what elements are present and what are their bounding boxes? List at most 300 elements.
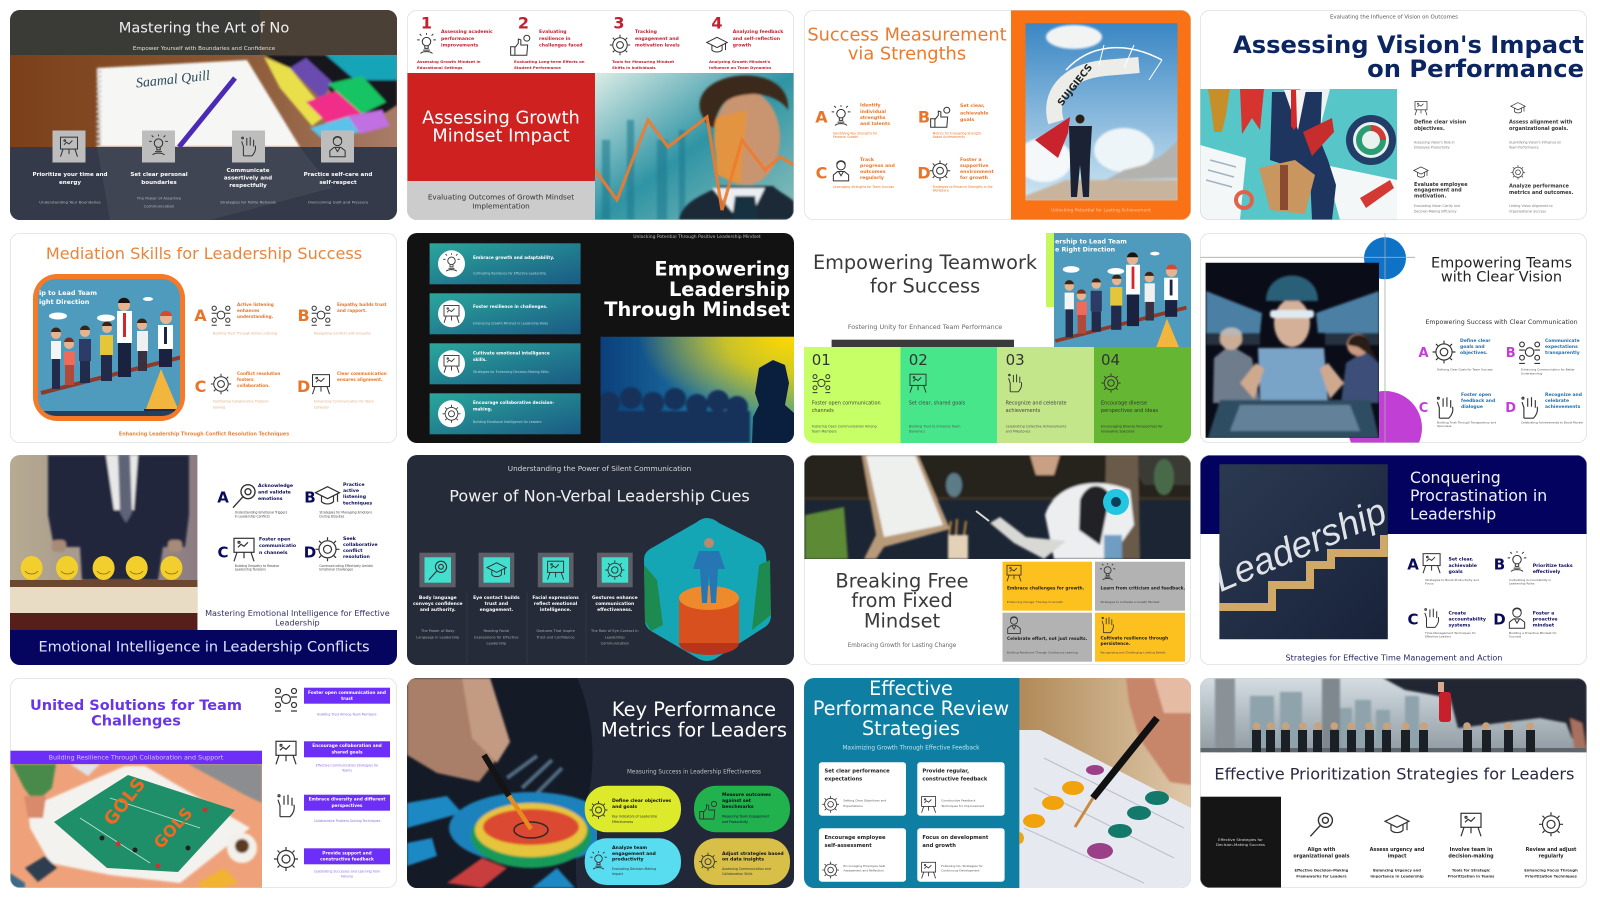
metric: objectives: Key Indicators of Leadership xyxy=(612,815,657,819)
tile: embrace growth: Cultivating Resilience for Effective Leadership xyxy=(473,271,546,275)
step: collaboration: Encourage collaboration and xyxy=(312,743,382,749)
item C: Foster open xyxy=(259,536,290,542)
step: support: constructive feedback xyxy=(320,856,374,862)
step: open communication xyxy=(275,688,390,717)
item D: Seek xyxy=(343,536,357,542)
item: align: Effective Decision-Making xyxy=(1295,868,1349,872)
metric: engagement: Evaluating Decision-Making xyxy=(612,867,656,871)
metric: outcomes: and Productivity xyxy=(722,820,748,824)
step 1: Educational Settings xyxy=(417,65,463,70)
column 03 xyxy=(997,347,1094,443)
cue: eye contact: Leadership xyxy=(487,641,507,645)
step 3 xyxy=(610,14,680,70)
item B: Navigating Conflicts with Empathy xyxy=(314,331,371,335)
item B xyxy=(918,103,988,139)
item: boundaries: boundaries xyxy=(141,180,177,186)
step: collaboration: Effective Communication Strategies for xyxy=(316,764,379,768)
metric: strategies: Assessing Communication and xyxy=(722,867,771,871)
item C: Leadership Tensions xyxy=(235,567,266,571)
step 2: Evaluating Long-term Effects on xyxy=(514,59,585,64)
metric: engagement: productivity xyxy=(612,856,644,862)
item: align: organizational goals xyxy=(1293,854,1350,860)
step 1: Assessing Growth Mindset in xyxy=(417,59,481,64)
item D: environment xyxy=(960,169,994,175)
step 1: improvements xyxy=(441,42,479,48)
metric: engagement: Analyze team xyxy=(612,845,647,851)
title xyxy=(1431,255,1572,286)
photo: figurines and a red pawn xyxy=(1200,678,1587,752)
step 3: motivation levels xyxy=(635,42,680,48)
item D: D xyxy=(1493,610,1506,628)
photo: team on a beam in rounded frame: ight Direction xyxy=(39,298,90,306)
metric: objectives: Effectiveness xyxy=(612,820,634,824)
item C xyxy=(217,536,297,571)
item D xyxy=(917,157,994,193)
column 01: Team Members xyxy=(811,430,837,434)
cue: body language: conveys confidence xyxy=(413,601,463,607)
subtitle: Mastering Emotional Intelligence for Effective xyxy=(205,608,390,618)
item A xyxy=(1418,338,1493,372)
cue: body language: Body language xyxy=(419,595,457,601)
purple band: Building Resilience Through Collaboration and Support xyxy=(49,753,224,761)
red title panel: Assessing Growth xyxy=(422,108,580,128)
column 02: Set clear, shared goals xyxy=(909,400,966,406)
card: clear expectations: expectations xyxy=(824,776,862,782)
subtitle: Empower Yourself with Boundaries and Confidence xyxy=(133,46,276,52)
metric: engagement: Impact xyxy=(612,872,624,876)
item: assess alignment: Quantifying Vision's Influence on xyxy=(1509,140,1561,144)
item D: D xyxy=(1505,401,1516,416)
metric: outcomes: Measure outcomes xyxy=(722,792,771,798)
item: involve team: Prioritization in Teams xyxy=(1448,874,1495,878)
item A: A xyxy=(1407,555,1419,573)
tile: emotional intelligence: Strategies for Enhancing Decision-Making Skills xyxy=(473,370,549,374)
item B: Enhancing Communication for Better xyxy=(1521,368,1575,372)
column 04: Innovative Solutions xyxy=(1101,430,1135,434)
orange panel xyxy=(1011,10,1191,220)
title: Success Measurement xyxy=(807,24,1007,46)
item A: Active listening xyxy=(237,302,274,307)
item: assess alignment xyxy=(1508,103,1573,149)
title: Through Mindset xyxy=(604,298,790,321)
title xyxy=(813,251,1038,298)
column 03: achievements xyxy=(1006,408,1041,414)
item: assess alignment: Assess alignment with xyxy=(1509,119,1573,125)
item B: Metrics for Evaluating Strength- xyxy=(933,131,982,135)
photo: robot drawing on a monitor xyxy=(804,455,1191,559)
metric: objectives xyxy=(585,786,681,832)
item: review xyxy=(1524,812,1578,878)
item C: Conflict resolution xyxy=(237,371,280,376)
item D: Recognize and xyxy=(1545,392,1582,398)
step: support: Failures xyxy=(341,875,353,879)
metric: outcomes: Measuring Team Engagement xyxy=(722,815,770,819)
card: clear expectations: Set clear performance xyxy=(824,769,890,775)
step 1: performance xyxy=(441,36,474,42)
slide: Mediation Skills for Leadership Success xyxy=(10,233,397,443)
cue: facial expressions: Gestures That Inspire xyxy=(536,629,576,633)
item C: C xyxy=(195,377,206,396)
column 01 xyxy=(804,347,900,443)
item D xyxy=(1493,608,1558,639)
card: self-assessment: Assessment and Reflection xyxy=(843,869,884,873)
title: for Success xyxy=(870,274,980,298)
item D: Building a Proactive Mindset for xyxy=(1509,631,1557,635)
photo: chalkboard with wooden steps: Leadership xyxy=(1208,490,1392,600)
item D: proactive xyxy=(1533,616,1558,622)
title: Mindset xyxy=(864,610,941,632)
slide: Empowering Teamwork for Success xyxy=(804,233,1191,443)
item D: Success xyxy=(1509,635,1522,639)
item B: B xyxy=(304,489,316,507)
item: boundaries: Set clear personal xyxy=(130,172,188,178)
tile: learn from criticism: Strategies to Cultivate a Growth Mindset xyxy=(1100,600,1160,604)
photo: team on a beam xyxy=(1054,233,1191,347)
item C: collaboration. xyxy=(237,383,270,388)
step: diversity: Collaborative Problem-Solving Techniques xyxy=(314,819,381,823)
cue: eye contact: engagement. xyxy=(480,607,513,613)
navy band with title xyxy=(1200,455,1587,534)
tile: embrace growth: Embrace growth and adaptability. xyxy=(473,255,555,261)
step: collaboration xyxy=(276,741,390,773)
title xyxy=(30,698,242,729)
title: Empowering Teamwork xyxy=(813,251,1038,274)
title xyxy=(835,570,969,632)
item D xyxy=(1505,392,1583,424)
step: collaboration: shared goals xyxy=(331,750,363,756)
card: regular feedback: Techniques for Improvement xyxy=(940,804,985,808)
item C: Solving xyxy=(213,405,225,409)
item D: Emotional Challenges xyxy=(319,567,353,571)
item B: B xyxy=(297,306,310,325)
item B: Practice xyxy=(343,482,364,488)
lime strip xyxy=(1046,233,1054,307)
item A: goals and xyxy=(1460,344,1485,350)
column 04 xyxy=(1094,347,1191,443)
step 4: 4 xyxy=(711,14,723,32)
item A xyxy=(1407,554,1479,586)
item A: and talents xyxy=(860,121,890,127)
dark bar xyxy=(832,340,1014,347)
subtitle: Maximizing Growth Through Effective Feedback xyxy=(842,745,980,751)
step 2: resilience in xyxy=(539,36,571,42)
item C xyxy=(1419,392,1496,428)
step: open communication: Foster open communication and xyxy=(308,690,386,696)
step 2: Student Performance xyxy=(514,65,561,70)
item B: Understanding xyxy=(1521,371,1542,375)
cue: gestures xyxy=(590,553,639,645)
item C: communicatio xyxy=(259,543,297,549)
item: boundaries xyxy=(130,130,188,208)
navy band with title: Conquering xyxy=(1410,468,1501,487)
item A: strengths xyxy=(860,115,886,121)
item D: D xyxy=(917,164,931,182)
item D: Communicating Effectively Amidst xyxy=(319,564,374,568)
step 3: Tracking xyxy=(635,29,657,35)
slide: Empowering Teams with Clear Vision xyxy=(1200,233,1587,465)
grey subtitle panel xyxy=(407,181,595,220)
card: development: and growth xyxy=(922,843,956,849)
step 3: Tools for Measuring Mindset xyxy=(612,59,674,64)
item: prioritize xyxy=(33,130,107,204)
subtitle: Measuring Success in Leadership Effectiveness xyxy=(627,770,761,776)
title xyxy=(808,28,1006,63)
step 4: growth xyxy=(733,42,751,48)
black side panel: Decision-Making Success xyxy=(1216,842,1265,847)
step 4 xyxy=(707,14,784,70)
photo: man reviewing documents xyxy=(1200,89,1397,220)
card: clear expectations: Expectations xyxy=(843,804,863,808)
metric: strategies xyxy=(694,838,790,885)
subtitle xyxy=(205,608,390,627)
title: Effective Prioritization Strategies for Leaders xyxy=(1214,764,1574,784)
tile: cultivate resilience xyxy=(1095,613,1185,662)
item: self-care: Practice self-care and xyxy=(304,172,372,178)
cue: gestures: communication xyxy=(595,601,634,607)
card: development: Focus on development xyxy=(922,835,989,841)
item B: techniques xyxy=(343,500,372,506)
card: self-assessment: self-assessment xyxy=(824,843,872,849)
item D: mindset xyxy=(1533,622,1555,628)
title: with Clear Vision xyxy=(1441,270,1562,286)
item B: goals xyxy=(960,117,974,123)
item D: Foster a xyxy=(960,157,982,163)
item: analyze metrics: metrics and outcomes. xyxy=(1509,190,1573,196)
item C: Time-Management Techniques for xyxy=(1424,631,1477,635)
photo: caped businessman and gauge xyxy=(1026,23,1178,200)
item A: Acknowledge xyxy=(258,483,293,489)
item: define objectives: Assessing Vision's Role in xyxy=(1414,140,1455,144)
photo: notebook and sticky notes xyxy=(10,10,397,220)
title: Key Performance xyxy=(612,698,776,721)
item B: Set clear, xyxy=(960,103,985,109)
photo: football pitch with GOALS on a scroll xyxy=(10,764,262,888)
item B: expectations xyxy=(1545,344,1578,350)
item: self-care: self-respect xyxy=(319,180,357,186)
item C xyxy=(1407,609,1486,639)
cue: facial expressions: reflect emotional xyxy=(534,601,578,607)
slide: Mastering the Art of No xyxy=(10,10,397,220)
metric: engagement xyxy=(585,838,681,885)
item B: Prioritize tasks xyxy=(1533,563,1573,569)
image: figure on a pedestal in a hexagon xyxy=(644,518,771,661)
cue: eye contact: Reading Facial xyxy=(483,629,509,633)
slide: Power of Non-Verbal Leadership Cues xyxy=(407,455,794,665)
photo: caped businessman and gauge: SUJGIECS xyxy=(1056,62,1095,108)
title: Metrics for Leaders xyxy=(601,718,787,742)
item C: progress and xyxy=(860,163,895,169)
item C: accountability xyxy=(1448,616,1486,622)
tile: learn from criticism: Learn from criticism and feedback. xyxy=(1100,586,1186,592)
column 01: channels xyxy=(812,408,834,414)
item: communicate: Strategies for Polite Refusals xyxy=(220,200,276,204)
title xyxy=(601,698,787,742)
item A: Understanding Emotional Triggers xyxy=(235,511,288,515)
item B: transparently xyxy=(1545,350,1580,356)
item A: enhances xyxy=(237,308,260,313)
photo: football pitch with GOALS on a scroll: GOLS xyxy=(150,804,196,852)
item: evaluate engagement: motivation. xyxy=(1414,194,1446,200)
navy band with title: Procrastination in xyxy=(1410,486,1547,505)
tile: foster resilience xyxy=(430,293,581,334)
item: involve team xyxy=(1448,813,1495,878)
item D: D xyxy=(297,377,310,396)
cue: eye contact xyxy=(473,553,520,645)
title: United Solutions for Team xyxy=(30,698,242,714)
footer: Strategies for Effective Time Management and Action xyxy=(1286,653,1502,663)
slide: Key Performance Metrics for Leaders xyxy=(407,678,794,888)
metric: strategies: on data insights xyxy=(722,856,764,862)
card: self-assessment xyxy=(819,828,906,882)
metric: objectives: Define clear objectives xyxy=(612,798,671,804)
black side panel: Effective Strategies for xyxy=(1218,837,1263,842)
item: urgency: Assess urgency and xyxy=(1370,847,1425,853)
photo: woman at a holographic table xyxy=(1206,262,1379,438)
column 02: 02 xyxy=(909,351,928,369)
tile: emotional intelligence: skills. xyxy=(473,357,487,363)
item B: During Disputes xyxy=(319,515,345,519)
step 3: engagement and xyxy=(635,36,679,42)
item B: achievable xyxy=(960,110,988,116)
slide: Success Measurement via Strengths xyxy=(804,10,1191,220)
item: assess alignment: Team Performance xyxy=(1508,145,1539,149)
tile: collaborative decisions xyxy=(430,393,581,434)
title: Effective xyxy=(869,677,953,700)
item D: resolution xyxy=(343,554,370,560)
tile: foster resilience: Foster resilience in challenges. xyxy=(473,304,548,310)
item: involve team: decision-making xyxy=(1448,854,1494,860)
photo: young man with chart xyxy=(595,73,794,220)
tile: embrace challenges: Enhancing Change: The Key to Growth xyxy=(1007,600,1063,604)
item B: listening xyxy=(343,494,366,500)
item C: C xyxy=(1407,610,1419,628)
tile: embrace growth xyxy=(430,243,581,284)
item A: Building Trust Through Active Listening xyxy=(213,331,277,335)
cue: facial expressions xyxy=(532,553,579,639)
title: on Performance xyxy=(1367,55,1584,83)
column 04: Encouraging Diverse Perspectives for xyxy=(1101,424,1163,428)
item: communicate: Communicate xyxy=(226,168,270,174)
item: evaluate engagement: Decision-Making Efficiency xyxy=(1414,210,1457,214)
item C: systems xyxy=(1448,622,1470,628)
item D: celebrate xyxy=(1545,398,1569,404)
tile: learn from criticism xyxy=(1095,562,1186,611)
footer: Enhancing Leadership Through Conflict Resolution Techniques xyxy=(119,431,289,437)
item: analyze metrics: Analyze performance xyxy=(1509,183,1569,189)
item: urgency: Balancing Urgency and xyxy=(1373,868,1421,872)
item: evaluate engagement: engagement and xyxy=(1414,188,1462,194)
item B: B xyxy=(918,108,930,126)
item: prioritize: Understanding Your Boundaries xyxy=(39,200,101,204)
title: Power of Non-Verbal Leadership Cues xyxy=(449,486,750,506)
item A: Define clear xyxy=(1460,338,1491,344)
item C: regularly xyxy=(860,175,884,181)
item A: individual xyxy=(860,109,886,115)
navy title band: Emotional Intelligence in Leadership Conflicts xyxy=(38,640,370,656)
item A: and validate xyxy=(258,490,291,496)
item C: n channels xyxy=(259,550,288,556)
item D: supportive xyxy=(960,163,988,169)
orange panel: Unlocking Potential for Lasting Achievement xyxy=(1051,208,1151,214)
card: clear expectations: Setting Clear Objectives and xyxy=(843,799,886,803)
item D: for growth xyxy=(960,175,988,181)
item: boundaries: Communication xyxy=(144,204,175,208)
slide: Empowering Leadership Through Mindset xyxy=(407,233,794,443)
step 3: 3 xyxy=(613,14,625,32)
item C: Create xyxy=(1448,610,1466,616)
column 01: 01 xyxy=(812,351,831,369)
item C: C xyxy=(1419,401,1428,416)
item A: A xyxy=(217,489,229,507)
column 02: Building Trust to Enhance Team xyxy=(909,424,960,428)
step 1 xyxy=(417,14,493,70)
item D: D xyxy=(304,544,316,562)
item: urgency: impact xyxy=(1388,854,1407,860)
card: regular feedback xyxy=(917,762,1005,816)
cue: facial expressions: Trust and Confidence xyxy=(536,635,575,639)
cue: eye contact: Expressions for Effective xyxy=(474,635,519,639)
item C: feedback and xyxy=(1461,398,1495,404)
step 3: Shifts in Individuals xyxy=(612,65,656,70)
item D: Enhancing Communication for Team xyxy=(314,400,374,404)
metric: engagement: engagement and xyxy=(612,851,656,857)
column 02 xyxy=(900,347,997,443)
item A: A xyxy=(194,306,207,325)
tile: emotional intelligence xyxy=(430,343,581,384)
title xyxy=(1233,34,1584,78)
column 03: 03 xyxy=(1006,351,1025,369)
step: diversity xyxy=(278,795,390,823)
step: support: Provide support and xyxy=(322,850,372,856)
card: regular feedback: constructive feedback xyxy=(922,776,988,782)
item: align xyxy=(1293,813,1350,878)
item B: Leadership Roles xyxy=(1509,582,1535,586)
column 01: Foster open communication xyxy=(812,400,881,406)
grey subtitle panel: Implementation xyxy=(472,202,530,210)
top subtitle: Unlocking Potential Through Positive Leadership Mindset xyxy=(633,234,761,240)
card: regular feedback: Provide regular, xyxy=(922,769,969,775)
step 2: 2 xyxy=(518,14,529,32)
item D: collaborative xyxy=(343,542,378,548)
title: Mastering the Art of No xyxy=(119,20,289,36)
tile: collaborative decisions: making. xyxy=(473,406,493,412)
item: define objectives: Define clear vision xyxy=(1414,119,1467,125)
item: communicate: assertively and xyxy=(224,176,272,182)
item: define objectives xyxy=(1414,101,1467,149)
cue: gestures: Leadership xyxy=(605,635,625,639)
step 2: challenges faced xyxy=(539,42,583,48)
title: Empowering xyxy=(654,258,790,280)
item D: Strategies to Enhance Strengths in the xyxy=(933,185,993,189)
title: Mediation Skills for Leadership Success xyxy=(46,244,362,263)
column 03: Recognize and celebrate xyxy=(1006,400,1067,406)
step: diversity: Embrace diversity and different xyxy=(309,796,385,802)
card: clear expectations xyxy=(819,762,906,816)
item: evaluate engagement xyxy=(1414,167,1468,214)
tile: emotional intelligence: Cultivate emotional intelligence xyxy=(473,350,550,356)
cue: gestures: The Role of Eye Contact in xyxy=(590,629,639,633)
card: development: Continuous Development xyxy=(941,869,980,873)
blue circle xyxy=(1364,237,1406,279)
title: Challenges xyxy=(91,713,181,729)
cue: facial expressions: Facial expressions xyxy=(532,595,579,601)
item A: emotions xyxy=(258,496,283,502)
photo: chalkboard with wooden steps xyxy=(1219,464,1388,640)
item D: achievements xyxy=(1545,404,1581,410)
subtitle: Embracing Growth for Lasting Change xyxy=(848,643,957,649)
slide: Conquering Procrastination in Leadership xyxy=(1200,455,1587,665)
item A: A xyxy=(1418,346,1429,361)
